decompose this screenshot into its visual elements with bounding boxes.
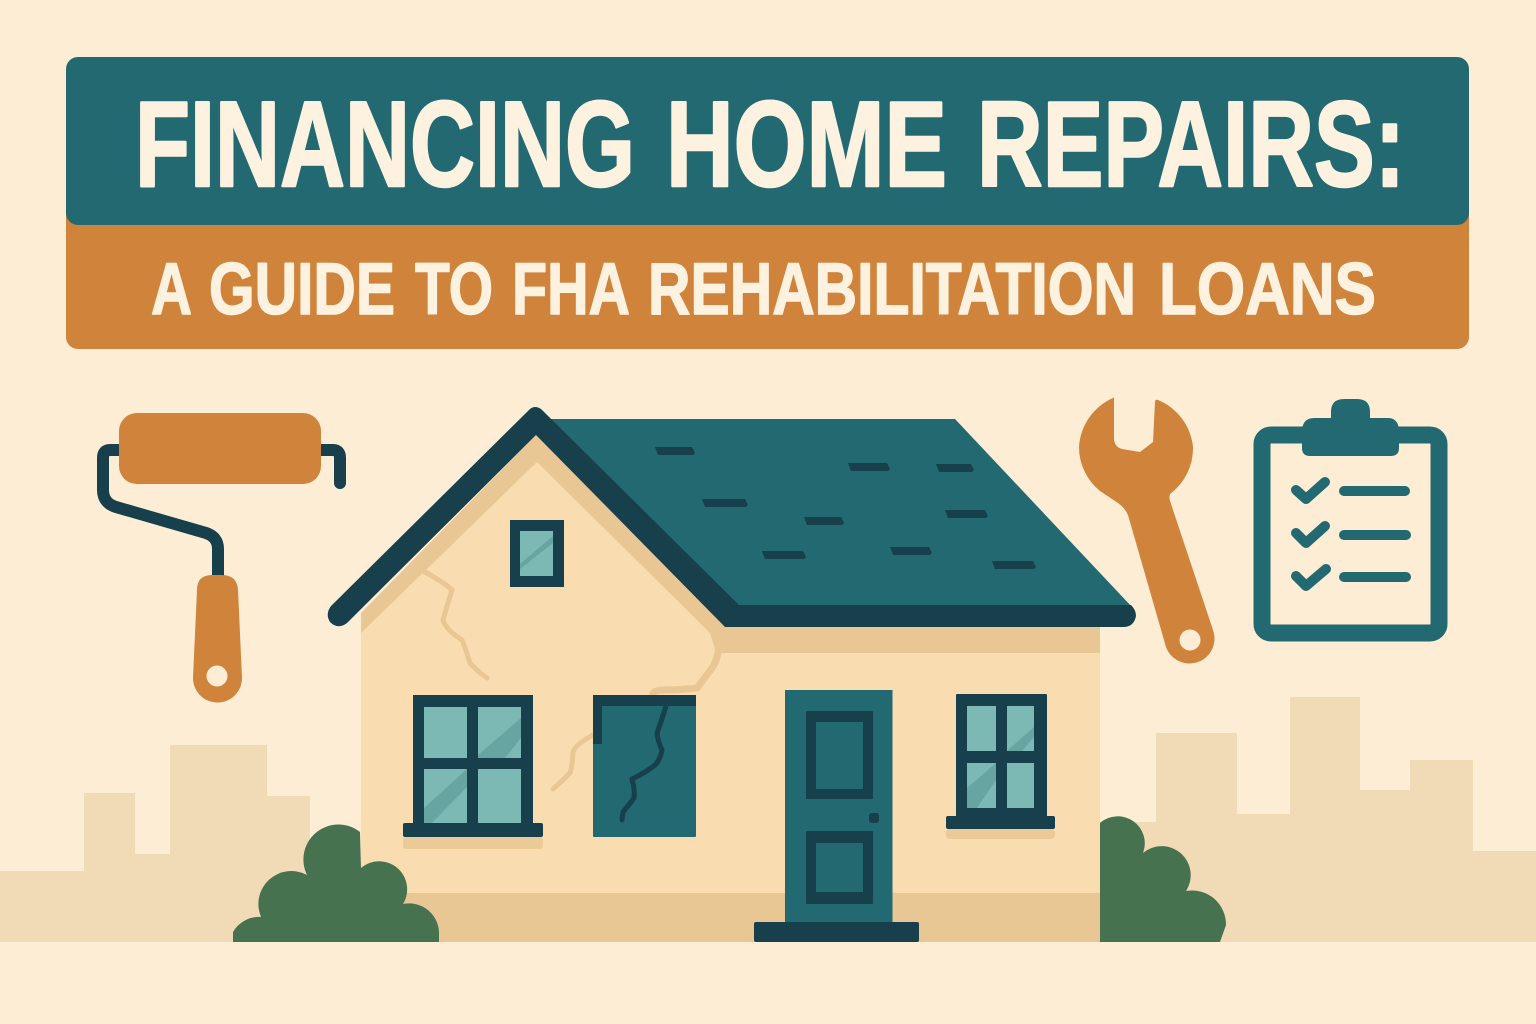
broken window bbox=[593, 695, 696, 837]
icon: paint roller bbox=[103, 413, 340, 702]
checkmarks bbox=[1296, 482, 1326, 586]
foundation band bbox=[400, 893, 1100, 942]
title text bbox=[135, 76, 1405, 212]
wall shadow under roof bbox=[361, 435, 1100, 653]
bush: left bbox=[233, 825, 439, 942]
attic window bbox=[510, 520, 564, 587]
roof shingles bbox=[655, 447, 1036, 569]
ground strip bbox=[0, 942, 1536, 1024]
house bbox=[328, 407, 1136, 942]
subtitle band bbox=[66, 200, 1469, 349]
title band bbox=[66, 57, 1469, 225]
icon: clipboard checklist bbox=[1262, 399, 1439, 633]
subtitle text: TO bbox=[415, 249, 493, 330]
title text: REPAIRS: bbox=[977, 76, 1405, 212]
subtitle text: LOANS bbox=[1159, 249, 1376, 330]
roof bbox=[545, 419, 1132, 607]
icon: wrench bbox=[1079, 397, 1214, 663]
title banner bbox=[66, 57, 1469, 349]
right window bbox=[946, 694, 1055, 839]
subtitle text: GUIDE bbox=[209, 249, 395, 330]
left window bbox=[403, 695, 543, 849]
title text: HOME bbox=[666, 76, 947, 212]
wall crack: right bbox=[653, 640, 720, 695]
front door bbox=[754, 690, 919, 942]
roof gable trim bbox=[328, 407, 741, 627]
checklist lines bbox=[1339, 486, 1411, 582]
subtitle text: FHA bbox=[512, 249, 630, 330]
title text: FINANCING bbox=[135, 76, 635, 212]
city skyline: left bbox=[0, 745, 310, 942]
subtitle text: REHABILITATION bbox=[648, 249, 1136, 330]
roof fascia bbox=[725, 605, 1136, 627]
wall crack: upper bbox=[425, 572, 487, 678]
subtitle text bbox=[151, 249, 1376, 330]
subtitle text: A bbox=[151, 249, 192, 330]
bush: right bbox=[1100, 816, 1226, 942]
wall crack: lower bbox=[553, 735, 593, 789]
wall bbox=[361, 435, 1100, 942]
city skyline: right bbox=[1090, 697, 1536, 942]
